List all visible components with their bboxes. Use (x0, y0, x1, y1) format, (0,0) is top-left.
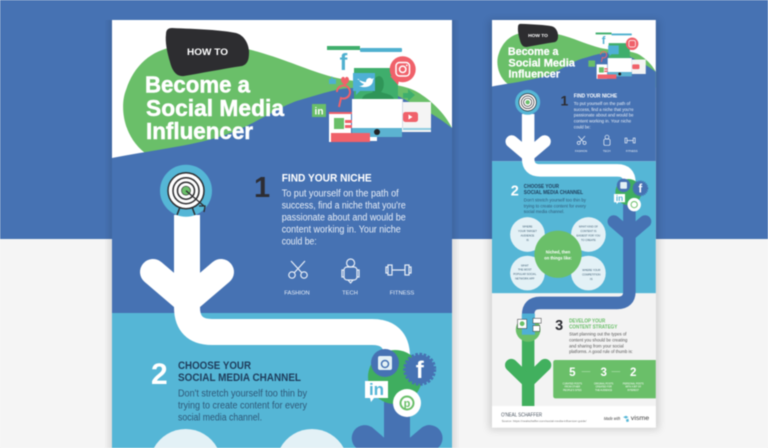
social media illustration: f (340, 49, 348, 75)
thumbnail title: Become a (508, 46, 559, 58)
step 3 text: Start planning out the types of (569, 332, 627, 338)
social icons cluster: f (416, 357, 425, 384)
panel: full infographic thumbnail (492, 20, 656, 428)
thumbnail blue section (492, 53, 656, 161)
panel: 5-3-2 rule: INTEREST (628, 390, 640, 392)
panel: 5-3-2 rule: FROM OTHER (565, 387, 580, 389)
step 1 text: To put yourself on the path of (282, 189, 399, 200)
topic circles diagram: CONTENT IS (580, 229, 597, 233)
icon: content strategy devices (516, 314, 541, 342)
thumbnail step 1 text: content working in. Your niche (574, 119, 631, 125)
thumbnail niche labels (574, 150, 638, 152)
panel: 5-3-2 rule: PEOPLE'S SITES (563, 390, 582, 392)
thumbnail niche labels: FASHION (575, 149, 587, 153)
social icons cluster: in (369, 380, 384, 399)
step 2 text (178, 389, 307, 424)
niche labels: FITNESS (390, 290, 414, 296)
niche labels: TECH (342, 290, 358, 296)
topic circles diagram: POPULAR SOCIAL (513, 272, 537, 276)
topic circles (154, 429, 344, 448)
panel: large infographic preview (112, 20, 452, 448)
step 1 text (282, 189, 406, 248)
thumbnail step 1 text: To put yourself on the path of (574, 101, 631, 107)
icon: robot (342, 259, 359, 283)
step 3 number: 3 (555, 318, 563, 334)
topic circles diagram: THE MOST (518, 268, 532, 272)
social icons cluster (365, 349, 434, 417)
panel: 5-3-2 rule: CURATED POSTS (563, 382, 582, 385)
thumbnail social icons cluster: in (616, 194, 623, 203)
thumbnail teal section (492, 161, 656, 293)
topic circles diagram: NETWORK APP (515, 276, 535, 280)
footer: O'NEAL SCHAFFER (501, 413, 542, 419)
step 1 heading: FIND YOUR NICHE (282, 172, 372, 184)
footer (492, 406, 656, 428)
thumbnail step 2 heading: SOCIAL MEDIA CHANNEL (524, 190, 584, 196)
step 3 heading: CONTENT STRATEGY (569, 324, 618, 330)
step 2 text: Don't stretch yourself too thin by (178, 389, 307, 400)
thumbnail white flow arrow (512, 114, 629, 189)
step 3 text (569, 332, 633, 355)
panel: 5-3-2 rule: 2 (630, 367, 636, 379)
topic circles diagram: TO CREATE (581, 238, 596, 242)
topic circles diagram: on things like: (544, 256, 572, 261)
step 2 text: social media channel. (178, 413, 262, 424)
topic circles diagram: IS (526, 238, 529, 242)
thumbnail step 2 text: social media channel. (524, 209, 564, 215)
thumbnail step 1 text: passionate about and would be (574, 113, 634, 119)
footer: visme (631, 415, 649, 422)
thumbnail step 1 text (574, 101, 634, 130)
thumbnail step 1 heading: FIND YOUR NICHE (574, 94, 618, 100)
thumbnail title: Influencer (508, 68, 561, 80)
topic circles diagram: YOUR TARGET (518, 229, 537, 233)
step 1 text: success, find a niche that you're (282, 201, 406, 212)
step 3 text: content you should be creating (569, 337, 628, 343)
step 3 text: and sharing from your social (569, 343, 624, 349)
title (145, 72, 284, 144)
step 1 number: 1 (254, 172, 270, 204)
social icons cluster: p (404, 398, 411, 410)
topic circles diagram: COMPETITION (582, 272, 601, 276)
topic circles diagram: WHERE YOUR (582, 268, 600, 272)
panel: 5-3-2 rule: ORIGINAL POSTS (594, 382, 614, 385)
step 2 heading: CHOOSE YOUR (178, 360, 251, 372)
topic circles diagram: AUDIENCE (521, 233, 535, 237)
step 1 text: could be: (282, 237, 317, 248)
step 3 text: platforms. A good rule of thumb is: (569, 349, 633, 355)
step 2 heading: SOCIAL MEDIA CHANNEL (178, 372, 301, 384)
thumbnail social icons cluster: f (638, 184, 642, 196)
thumbnail step 2 text (524, 198, 587, 215)
thumbnail niche icons (577, 135, 635, 145)
thumbnail step 1 text: could be: (574, 124, 591, 130)
thumbnail step 2 heading (524, 184, 584, 196)
niche labels (284, 290, 414, 296)
social media illustration: in (315, 106, 323, 118)
thumbnail how to badge: HOW TO (528, 33, 548, 38)
topic circles diagram: IS (590, 277, 593, 281)
topic circles diagram: WHAT KIND OF (579, 225, 598, 229)
step 1 text: passionate about and would be (282, 213, 406, 224)
thumbnail green header blob (497, 32, 656, 87)
panel: step 1 blue section (112, 88, 452, 313)
green flow arrow (511, 329, 545, 406)
thumbnail niche labels: TECH (603, 149, 611, 153)
panel: 5-3-2 rule (553, 360, 656, 398)
title: Influencer (146, 118, 253, 144)
panel: step 2 teal section (112, 313, 452, 448)
panel: 5-3-2 rule: 3 (600, 367, 607, 379)
panel: 5-3-2 rule: 5 (569, 367, 576, 379)
step 2 number: 2 (151, 358, 168, 391)
footer: Made with (604, 416, 620, 422)
white flow arrow (153, 215, 397, 370)
thumbnail title: Social Media (508, 57, 576, 69)
thumbnail social media illustration: f (602, 35, 606, 47)
topic circles diagram: WHAT (521, 263, 529, 267)
thumbnail niche labels: FITNESS (626, 149, 638, 153)
thumbnail icon: target (515, 90, 540, 115)
blue flow arrow (351, 402, 443, 448)
step 1 text: content working in. Your niche (282, 225, 401, 236)
step 3 heading: DEVELOP YOUR (569, 319, 605, 325)
thumbnail gray section (492, 293, 656, 406)
step 2 heading (178, 360, 301, 384)
title: Become a (145, 72, 250, 98)
thumbnail step 1 number: 1 (560, 92, 568, 108)
niche labels: FASHION (284, 290, 310, 296)
topic circles diagram (510, 217, 606, 290)
topic circles diagram: WHERE (523, 225, 533, 229)
thumbnail step 2 heading: CHOOSE YOUR (524, 184, 559, 190)
thumbnail step 2 text: Don't stretch yourself too thin by (524, 198, 587, 204)
icon: scissors (289, 261, 307, 278)
green header blob (123, 45, 452, 160)
title: Social Media (146, 95, 284, 121)
thumbnail step 2 number: 2 (511, 183, 519, 199)
icon: target (160, 165, 212, 217)
topic circles diagram: Niched, then (546, 249, 571, 254)
thumbnail blue flow arrow (528, 198, 645, 324)
thumbnail social media illustration (588, 33, 646, 79)
panel: 5-3-2 rule: THE AUDIENCE (595, 389, 613, 392)
thumbnail step 1 text: success, find a niche that you're (574, 107, 634, 113)
thumbnail title (508, 46, 576, 80)
thumbnail social icons cluster (614, 179, 647, 211)
how to badge: HOW TO (187, 47, 228, 58)
panel: 5-3-2 rule: PERSONAL POSTS (623, 382, 644, 385)
social media illustration (312, 46, 431, 142)
how to badge (166, 28, 249, 76)
thumbnail step 2 text: trying to create content for every (524, 203, 587, 209)
topic circles diagram: EASIEST FOR YOU (576, 233, 600, 237)
icon: dumbbell (386, 265, 411, 275)
panel: 5-3-2 rule: CREATED FOR (596, 386, 612, 389)
step 3 heading (569, 319, 618, 330)
thumbnail how to badge (518, 24, 558, 47)
panel: 5-3-2 rule: WITH A BIT OF (625, 386, 642, 389)
footer: Source: https://nealschaffer.com/social-media-influencer-guide/ (502, 420, 587, 423)
step 2 text: trying to create content for every (178, 401, 307, 412)
